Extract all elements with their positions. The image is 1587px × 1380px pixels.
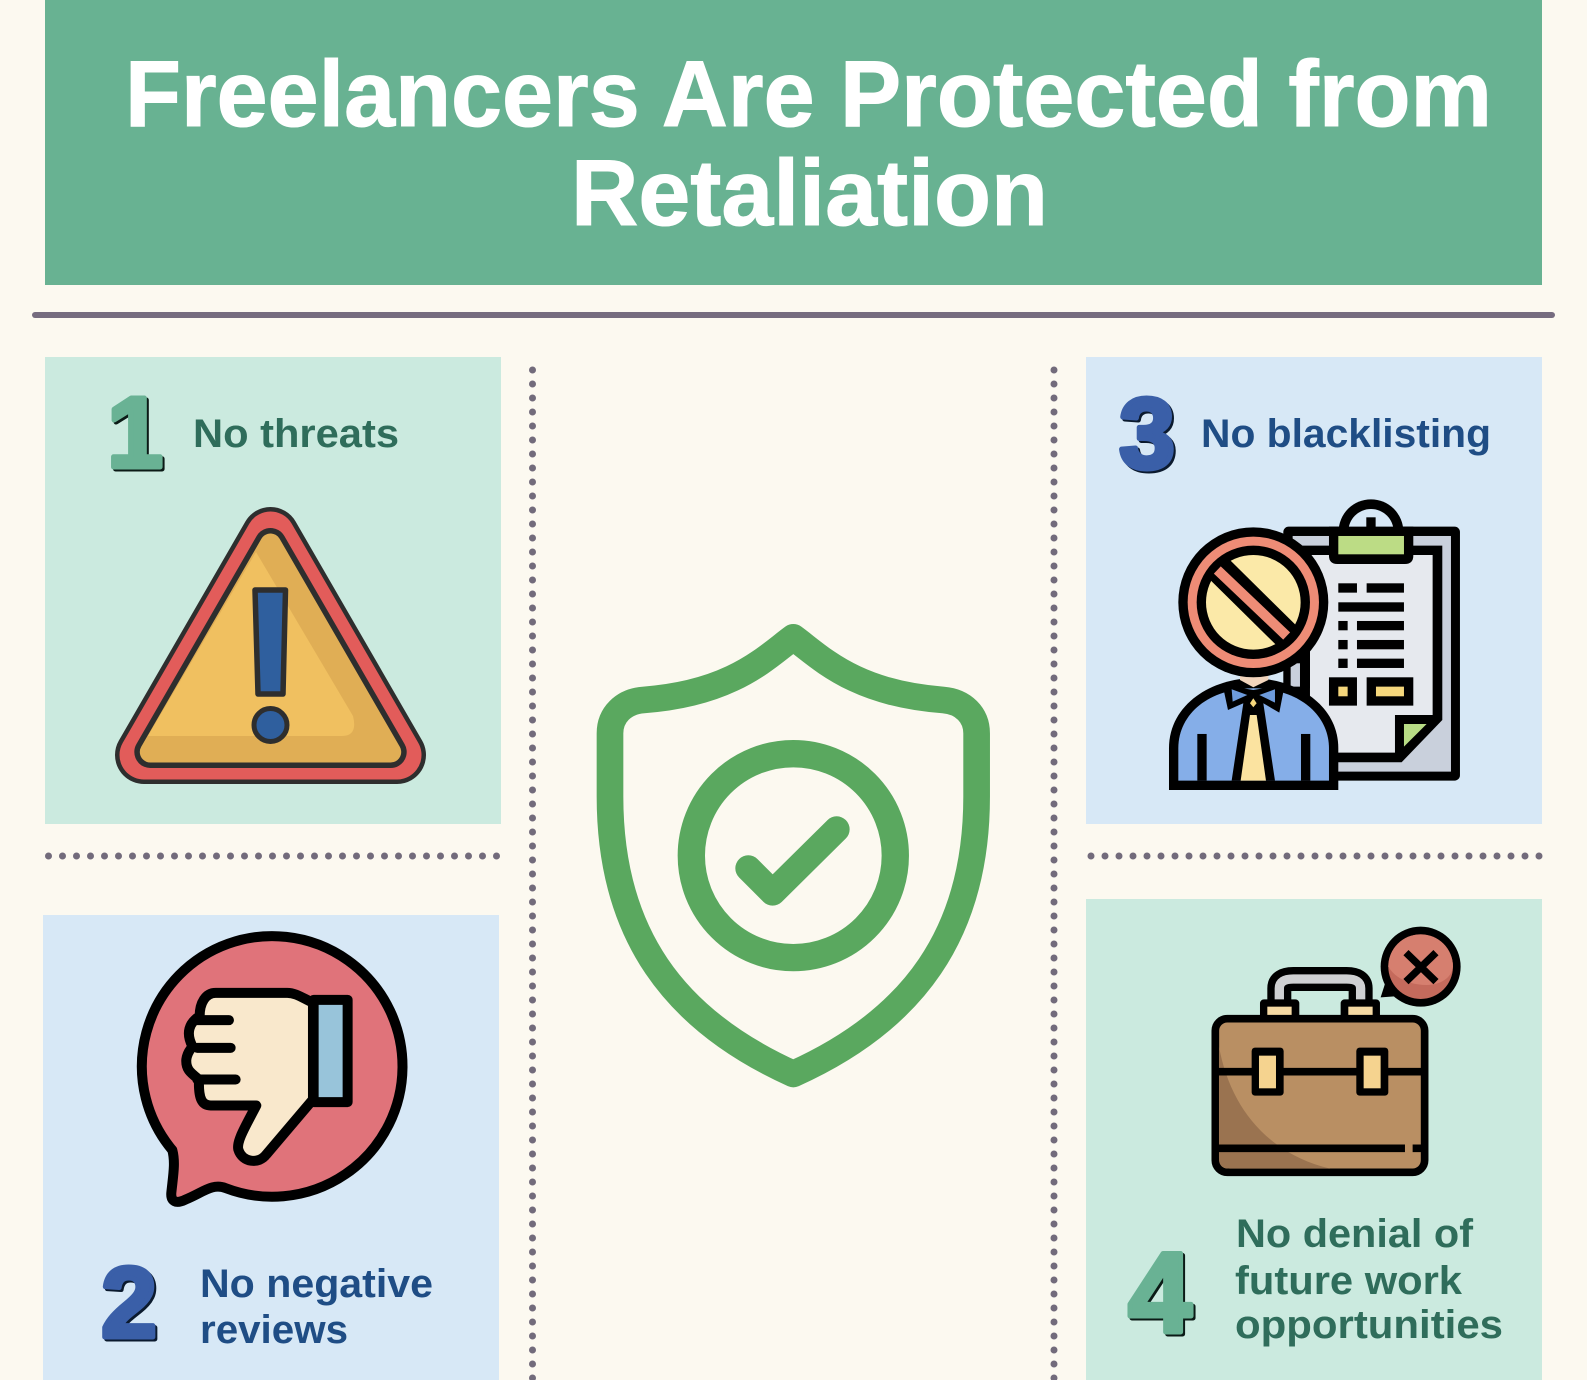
- title text: Freelancers Are Protected from: [125, 41, 1492, 146]
- title text: Retaliation: [571, 140, 1048, 245]
- panel: no threats: [45, 357, 501, 824]
- number 3: 3: [1119, 378, 1175, 490]
- label: no blacklisting: No blacklisting: [1201, 412, 1491, 456]
- panel: no denial of future work: [1086, 899, 1542, 1380]
- label: no negative reviews: [200, 1262, 433, 1352]
- number 4: 4: [1128, 1230, 1192, 1357]
- label: no threats: No threats: [193, 412, 399, 456]
- central shield icon: [610, 637, 977, 1074]
- label: no negative reviews: reviews: [200, 1308, 348, 1352]
- number 2: 2: [101, 1247, 157, 1359]
- label: no denial of future work opportunities: future work: [1235, 1259, 1463, 1303]
- icon: briefcase with rejection bubble: [1215, 927, 1461, 1172]
- title text: [125, 41, 1492, 245]
- label: no denial of future work opportunities: [1235, 1212, 1503, 1347]
- icon: blacklisted person and clipboard: [1169, 499, 1460, 790]
- panel: no negative reviews: [43, 915, 499, 1380]
- number 1: 1: [107, 377, 163, 489]
- label: no denial of future work opportunities: opportunities: [1235, 1303, 1503, 1347]
- panel: no blacklisting: [1086, 357, 1542, 824]
- icon: warning triangle: [144, 536, 397, 755]
- label: no denial of future work opportunities: No denial of: [1236, 1212, 1474, 1256]
- label: no negative reviews: No negative: [200, 1262, 433, 1306]
- icon: thumbs down speech bubble: [142, 936, 402, 1202]
- title banner: [45, 0, 1542, 285]
